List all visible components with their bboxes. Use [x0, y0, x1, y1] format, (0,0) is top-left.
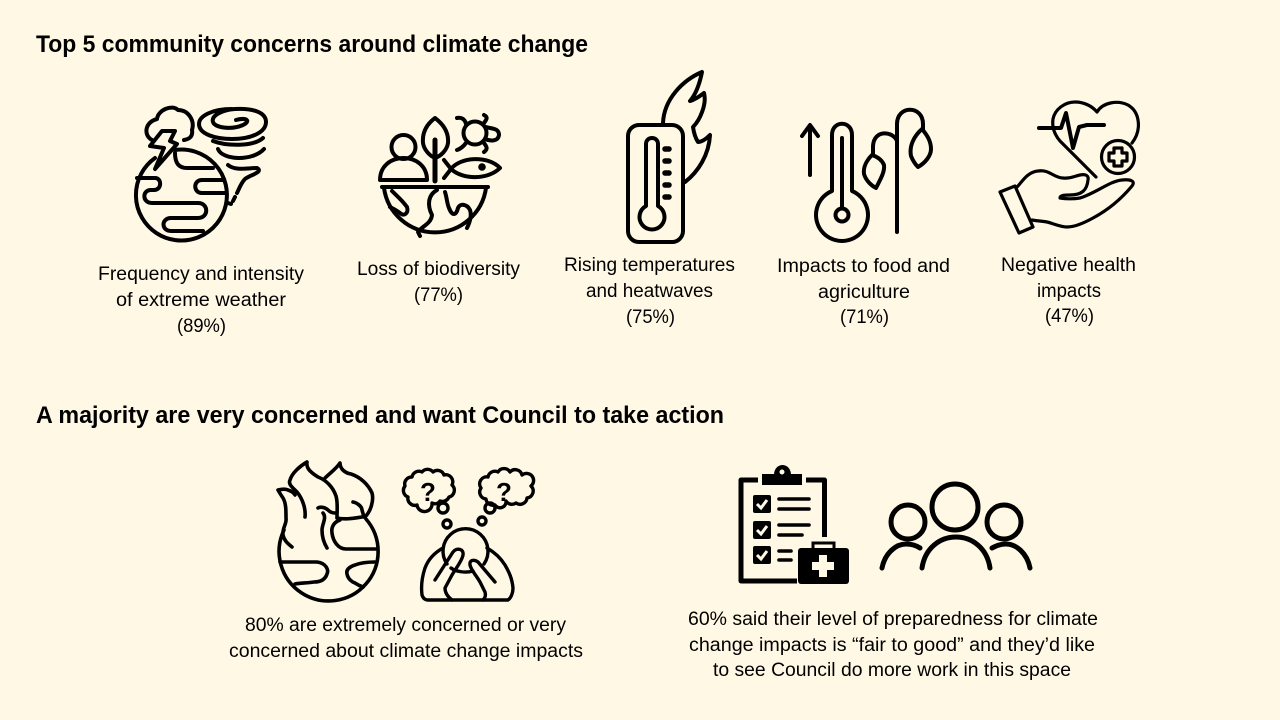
- heading: top 5 concerns: Top 5 community concerns around climate change: [36, 31, 588, 58]
- label: extreme weather: of extreme weather: [116, 290, 287, 311]
- label: food and agriculture: (71%): [840, 307, 889, 328]
- label: health impacts: Negative health: [1001, 255, 1136, 276]
- text: 60% preparedness: 60% said their level of preparedness for climate: [688, 609, 1098, 630]
- label: food and agriculture: Impacts to food and: [777, 256, 950, 277]
- icon: globe with storm and tornado: [136, 108, 266, 241]
- icon: burning globe: [278, 462, 378, 601]
- label: health impacts: impacts: [1037, 281, 1101, 302]
- text: 60% preparedness: change impacts is “fair to good” and they’d like: [689, 635, 1095, 656]
- text: 80% concerned: [229, 615, 583, 662]
- text: 60% preparedness: to see Council do more work in this space: [713, 660, 1071, 681]
- label: biodiversity: (77%): [414, 285, 463, 306]
- icon: loss of biodiversity bowl: [380, 115, 500, 236]
- label: food and agriculture: [777, 256, 950, 328]
- text: 60% preparedness: [688, 609, 1098, 681]
- label: extreme weather: (89%): [177, 316, 226, 337]
- text: 80% concerned: concerned about climate change impacts: [229, 641, 583, 662]
- question marks in thought clouds: ?: [420, 477, 436, 507]
- text: 80% concerned: 80% are extremely concerned or very: [245, 615, 566, 636]
- label: biodiversity: Loss of biodiversity: [357, 259, 520, 280]
- icon: person with head in hands and thought clouds: [403, 469, 534, 600]
- icon: clipboard with checklist and medical kit: [741, 465, 849, 584]
- label: temperatures: Rising temperatures: [564, 255, 735, 276]
- label: health impacts: [1001, 255, 1136, 327]
- label: temperatures: and heatwaves: [586, 281, 713, 302]
- icon: thermometer with flame: [628, 72, 710, 242]
- question marks in thought clouds: ?: [496, 477, 512, 507]
- label: biodiversity: [357, 259, 520, 306]
- icon: hand holding heart: [1000, 102, 1138, 233]
- label: health impacts: (47%): [1045, 306, 1094, 327]
- icon: group of three people: [882, 484, 1030, 568]
- label: temperatures: [564, 255, 735, 328]
- icon: thermometer with wilting plant: [802, 110, 931, 241]
- heading: majority concerned: A majority are very concerned and want Council to take action: [36, 402, 724, 429]
- label: extreme weather: [98, 264, 304, 337]
- label: temperatures: (75%): [626, 307, 675, 328]
- label: extreme weather: Frequency and intensity: [98, 264, 304, 285]
- label: food and agriculture: agriculture: [818, 282, 910, 303]
- question marks in thought clouds: [420, 477, 512, 507]
